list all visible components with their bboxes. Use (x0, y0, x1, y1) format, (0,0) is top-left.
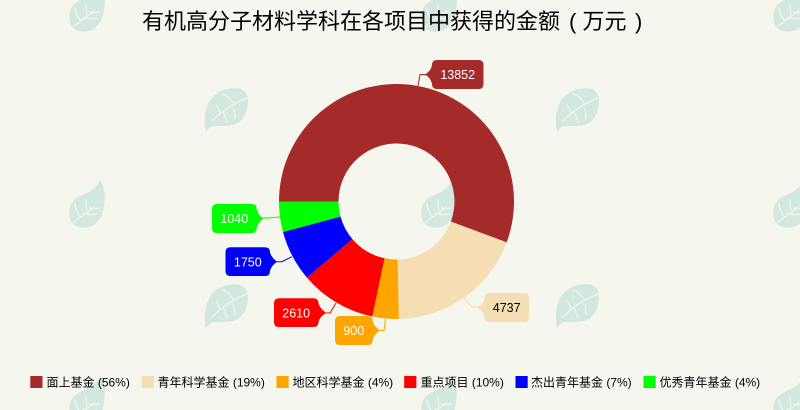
legend (30, 374, 760, 390)
title: ( (569, 9, 577, 34)
slice: 青年科学基金 4737 (398, 222, 507, 319)
legend item: 青年科学基金: 青年科学基金 (19%) (158, 374, 265, 390)
title: 有机高分子材料学科在各项目中获得的金额 (142, 9, 560, 34)
legend item: 杰出青年基金: 杰出青年基金 (7%) (531, 374, 632, 390)
callout: 900: 900 (343, 324, 364, 338)
slice: 重点项目 2610 (307, 239, 385, 316)
callout: 1750 (226, 247, 292, 276)
callout: 1750: 1750 (234, 255, 262, 269)
callout: 13852: 13852 (440, 68, 475, 82)
slice: 杰出青年基金 1750 (283, 217, 352, 278)
legend item: 面上基金: 面上基金 (56%) (46, 374, 130, 390)
callout: 2610 (274, 298, 336, 327)
donut chart (279, 84, 514, 319)
slice: 面上基金 13852 (279, 84, 514, 242)
callout: 900 (335, 316, 386, 345)
callout: 1040 (212, 204, 280, 233)
callout: 4737: 4737 (493, 301, 521, 315)
legend item: 优秀青年基金: 优秀青年基金 (4%) (660, 374, 760, 390)
callout: 13852 (418, 60, 484, 89)
title: ) (635, 9, 642, 34)
legend item: 地区科学基金: 地区科学基金 (4%) (292, 374, 393, 390)
callout: 2610: 2610 (282, 306, 310, 320)
callout: 4737 (464, 293, 529, 322)
slice: 优秀青年基金 1040 (279, 202, 340, 232)
slice: 地区科学基金 900 (372, 258, 399, 319)
title: 万元 (582, 9, 627, 34)
callout: 1040: 1040 (220, 212, 248, 226)
legend item: 重点项目: 重点项目 (10%) (420, 376, 504, 390)
